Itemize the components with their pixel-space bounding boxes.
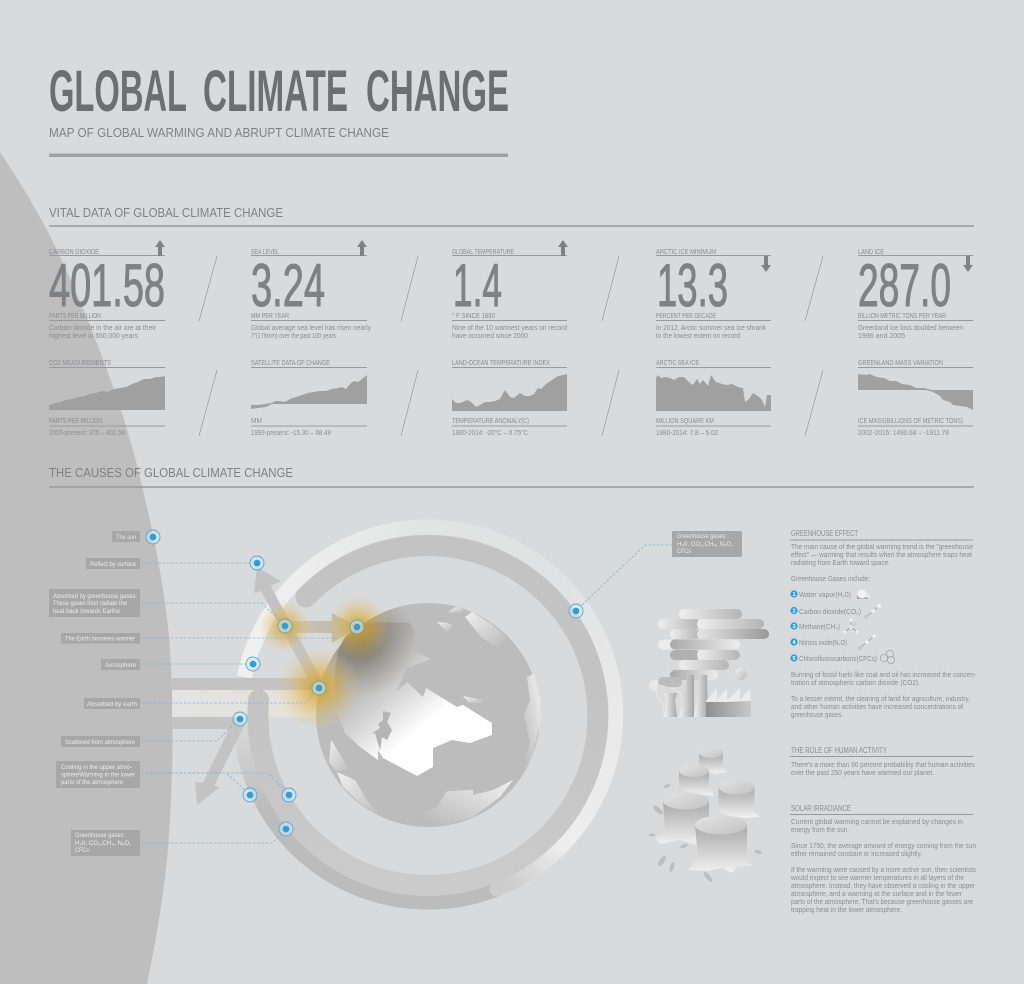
text block: greenhouse effect: Burning of fossil fuels like coal and oil has increased the concen- (791, 672, 977, 679)
label: reflect by surface (86, 558, 140, 569)
label: cooling in upper atmosphere: Cooling in the upper atmo- (61, 764, 132, 771)
title (49, 59, 509, 124)
panel: arctic ice minimum: MILLION SQUARE KM (656, 418, 714, 425)
text block: solar irradiance: SOLAR IRRADIANCE (791, 804, 851, 813)
text block: solar irradiance: either remained constant or increased slightly. (791, 851, 922, 858)
continent: main landmass (335, 622, 492, 776)
text block: solar irradiance: would expect to see warmer temperatures in all layers of the (790, 875, 964, 882)
panel: arctic ice minimum (656, 249, 771, 437)
glow: heat points (259, 595, 390, 730)
chart: satellite data (251, 375, 367, 409)
icon: methane molecule (844, 618, 858, 634)
text block: solar irradiance: parts of the atmosphere. That's because greenhouse gasses are (791, 899, 973, 906)
gas list: 1 (792, 592, 796, 598)
panel: land ice: GREENLAND MASS VARIATION (858, 360, 943, 367)
panel: land ice: BILLION METRIC TONS PER YEAR (858, 313, 946, 320)
text block: greenhouse effect: radiating from Earth toward space. (791, 560, 890, 567)
label: absorbed by greenhouse gases: heat back towards Earthe (53, 608, 120, 615)
glow shading on earth (328, 608, 408, 688)
gas list: Carbon dioxide(CO₂) (799, 609, 861, 616)
label: greenhouse gases right: CFCs (677, 548, 691, 555)
label: reflect by surface: Reflect by surface (90, 561, 136, 568)
panel: arctic ice minimum: to the lowest extent on record (656, 333, 740, 340)
panel: land ice: Greenland ice loss doubled between (858, 325, 963, 332)
text block: solar irradiance: If the warming were caused by a more active sun, then scientists (791, 867, 976, 874)
value: 287.0: 287.0 (858, 252, 951, 319)
arrow: up (155, 240, 165, 256)
factory buildings (657, 675, 751, 717)
tree stumps illustration (648, 748, 762, 883)
panel: sea level (251, 240, 371, 437)
gas list: 4 (792, 640, 796, 646)
label: absorbed by greenhouse gases: Absorbed by greenhouse gases. (53, 593, 137, 600)
text block: solar irradiance: trapping heat in the lower atmosphere. (791, 907, 902, 914)
gas list: Water vapor(H₂0) (799, 592, 851, 599)
label: scattered from atmosphere (61, 736, 140, 747)
panel: arctic ice minimum: ARCTIC ICE MINIMUM (656, 249, 716, 256)
label: aerosphere (101, 659, 140, 670)
panel: global temperature (452, 240, 568, 437)
panel: carbon dioxide: 2005-present: 375 – 401.58 (49, 430, 125, 437)
chart: land-ocean temperature (452, 374, 567, 411)
text block: greenhouse effect: tration of atmospheric carbon dioxide (CO2). (791, 680, 920, 687)
label: cooling in upper atmosphere (56, 761, 140, 788)
stump 4 (655, 792, 709, 846)
factory illustration (649, 609, 769, 717)
value: 1.4: 1.4 (453, 252, 502, 319)
icon: CFC molecule (880, 650, 895, 664)
gas list: Chlorofluorocarbons(CFCs) (799, 656, 877, 663)
text block: greenhouse effect: greenhouse gases. (791, 712, 843, 719)
stump 3 (718, 780, 760, 818)
label: greenhouse gases left: H₂0, CO₂,CH₄, N₂O, (75, 840, 131, 847)
label: absorbed by greenhouse gases: These gases then radiate the (53, 600, 127, 607)
chart: CO2 measurements (49, 376, 165, 410)
gas list: Methane(CH₄) (799, 624, 840, 631)
label: cooling in upper atmosphere: parts of the atmosphere (61, 779, 123, 786)
panel: arctic ice minimum: In 2012, Arctic summer sea ice shrank (656, 325, 766, 332)
continents: small lands (329, 607, 541, 825)
stump 1 (699, 748, 727, 774)
panel: global temperature: GLOBAL TEMPERATURE (452, 249, 514, 256)
arrow: up (558, 240, 568, 256)
panel: global temperature: ° F SINCE 1880 (452, 312, 495, 320)
panel: arctic ice minimum: 1980-2014: 7.8 – 5.02 (656, 430, 718, 437)
gas list: 5 (792, 656, 796, 662)
label: greenhouse gases right: Greenhouse gases: (677, 533, 727, 540)
label: greenhouse gases left: Greenhouse gases: (75, 832, 125, 839)
text block: solar irradiance: Current global warming cannot be explained by changes in (791, 819, 963, 826)
text block: greenhouse effect: Greenhouse Gases include: (791, 576, 870, 583)
panel: carbon dioxide: CARBON DIOXIDE (49, 249, 99, 256)
text block: solar irradiance: energy from the sun. (791, 827, 849, 834)
text block: human activity: There's a more than 90 percent probability that human activities (791, 762, 975, 769)
heat tube ring (258, 546, 598, 886)
arrow: down (761, 256, 771, 272)
panel: carbon dioxide: highest level in 650,000 years (49, 333, 138, 340)
label: greenhouse gases left: CFCs (75, 847, 89, 854)
text block: solar irradiance: Since 1750, the average amount of energy coming from the sun (791, 843, 976, 850)
diagram markers (146, 530, 583, 836)
incoming solar bars (172, 678, 322, 729)
island (371, 711, 392, 750)
gas list: Nitrous oxide(N₂O) (799, 640, 847, 647)
text block: human activity (790, 746, 975, 777)
panel: carbon dioxide: CO2 MEASUREMENTS (49, 360, 111, 367)
value: 401.58: 401.58 (49, 252, 165, 319)
panel: global temperature: 1880-2014: -20°C – 0.75°C (452, 429, 528, 437)
label: earth becomes warmer: The Earth becomes warmer (65, 636, 136, 642)
text block: greenhouse effect: The main cause of the global warming trend is the "greenhouse (791, 544, 973, 551)
panel: carbon dioxide: PARTS PER MILLION (49, 313, 101, 320)
label: cooling in upper atmosphere: sphereWarming in the lower (61, 772, 136, 778)
icon: carbon dioxide molecule (864, 604, 881, 619)
panel: land ice: 2002-2015: 1490.68 – -1911.78 (858, 430, 949, 437)
arrow: down (963, 256, 973, 272)
panel: sea level: SATELLITE DATA OF CHANGE (251, 360, 330, 367)
text block: greenhouse effect: GREENHOUSE EFFECT (791, 529, 858, 538)
diagram: greenhouse effect ring and earth (172, 527, 616, 902)
panel: sea level: SEA LEVEL (251, 249, 279, 256)
heading: causes: THE CAUSES OF GLOBAL CLIMATE CHANGE (49, 465, 293, 480)
label: absorbed by earth: Absorbed by earth (87, 701, 137, 708)
title: CHANGE (366, 59, 509, 124)
panel: sea level: Global average sea level has risen nearly (251, 325, 371, 332)
chart: greenland mass (858, 374, 973, 410)
connector lines (141, 545, 672, 843)
label: scattered from atmosphere: Scattered from atmosphere (65, 739, 135, 746)
label: the sun: The sun (116, 534, 136, 541)
text block: human activity: THE ROLE OF HUMAN ACTIVITY (791, 746, 888, 755)
text block: greenhouse effect: To a lesser extent, the clearing of land for agriculture, industry, (791, 696, 970, 703)
label: absorbed by greenhouse gases (49, 589, 140, 617)
panel: land ice: LAND ICE (858, 249, 884, 256)
gas list: 2 (792, 608, 796, 614)
panel: arctic ice minimum: ARCTIC SEA ICE (656, 360, 699, 367)
panel: sea level: 7"(178mm) over the past 100 years (251, 333, 336, 340)
arrow: radiated toward earth (285, 613, 358, 643)
panel: carbon dioxide (49, 240, 165, 437)
smoke clouds (649, 609, 769, 691)
label: greenhouse gases left (71, 830, 140, 856)
panel: land ice: 1996 and 2005 (858, 333, 905, 340)
arrow: up (357, 240, 367, 256)
panel: land ice: ICE MASS(BILLIONS OF METRIC TONS) (858, 418, 963, 425)
value: 13.3: 13.3 (657, 252, 728, 319)
title: CLIMATE (203, 59, 348, 124)
text block: solar irradiance: atmosphere, and a warming at the surface and in the lower (791, 891, 963, 898)
panel: carbon dioxide: Carbon dioxide in the air are at their (49, 325, 157, 332)
panel: sea level: 1993-present: -15.30 – 68.49 (251, 430, 331, 437)
wood chips (648, 783, 762, 883)
panel: global temperature: TEMPERATURE ANOMALY(C) (452, 418, 529, 425)
text block: greenhouse effect: effect" — warming that results when the atmosphere traps heat (791, 552, 972, 559)
panel: arctic ice minimum: PERCENT PER DECADE (656, 313, 716, 320)
panel: sea level: MM (251, 418, 262, 425)
panel: global temperature: LAND-OCEAN TEMPERATURE INDEX (452, 360, 550, 367)
subtitle: MAP OF GLOBAL WARMING AND ABRUPT CLIMATE CHANGE (49, 125, 389, 140)
gas list (790, 590, 877, 663)
label: greenhouse gases right: H₂0, CO₂,CH₄, N₂O, (677, 541, 733, 548)
text block: solar irradiance: atmosphere. Instead, they have observed a cooling in the upper (791, 883, 976, 890)
panel: carbon dioxide: PARTS PER MILLION (49, 418, 102, 425)
panel: land ice (858, 249, 973, 437)
arrow: reflected upward (254, 567, 325, 691)
text block: solar irradiance (790, 804, 976, 914)
panel: global temperature: Nine of the 10 warmest years on record (452, 325, 567, 332)
stump 5 (688, 816, 752, 873)
label: greenhouse gases right (672, 531, 742, 557)
panel: global temperature: have occurred since 2000 (452, 333, 528, 340)
earth (316, 603, 541, 827)
label: earth becomes warmer (61, 633, 140, 644)
atmosphere ring (240, 527, 616, 902)
label: aerosphere: Aerosphere (105, 662, 136, 669)
arrow: scattered downward (195, 717, 246, 805)
chart: arctic sea ice (656, 375, 771, 411)
label: the sun (112, 531, 140, 542)
heading: vital data: VITAL DATA OF GLOBAL CLIMATE CHANGE (49, 205, 283, 220)
text block: greenhouse effect (790, 529, 977, 719)
label: absorbed by earth (84, 698, 140, 709)
gas list: 3 (792, 624, 796, 630)
value: 3.24: 3.24 (251, 252, 325, 319)
text block: greenhouse effect: and other human activities have increased concentrations of (791, 704, 963, 711)
icon: nitrous oxide molecule (858, 634, 876, 650)
stump 2 (679, 765, 714, 796)
title: GLOBAL (49, 59, 187, 124)
text block: human activity: over the past 250 years have warmed our planet. (791, 770, 934, 777)
icon: water molecule (857, 590, 870, 599)
panel: sea level: MM PER YEAR (251, 313, 289, 320)
